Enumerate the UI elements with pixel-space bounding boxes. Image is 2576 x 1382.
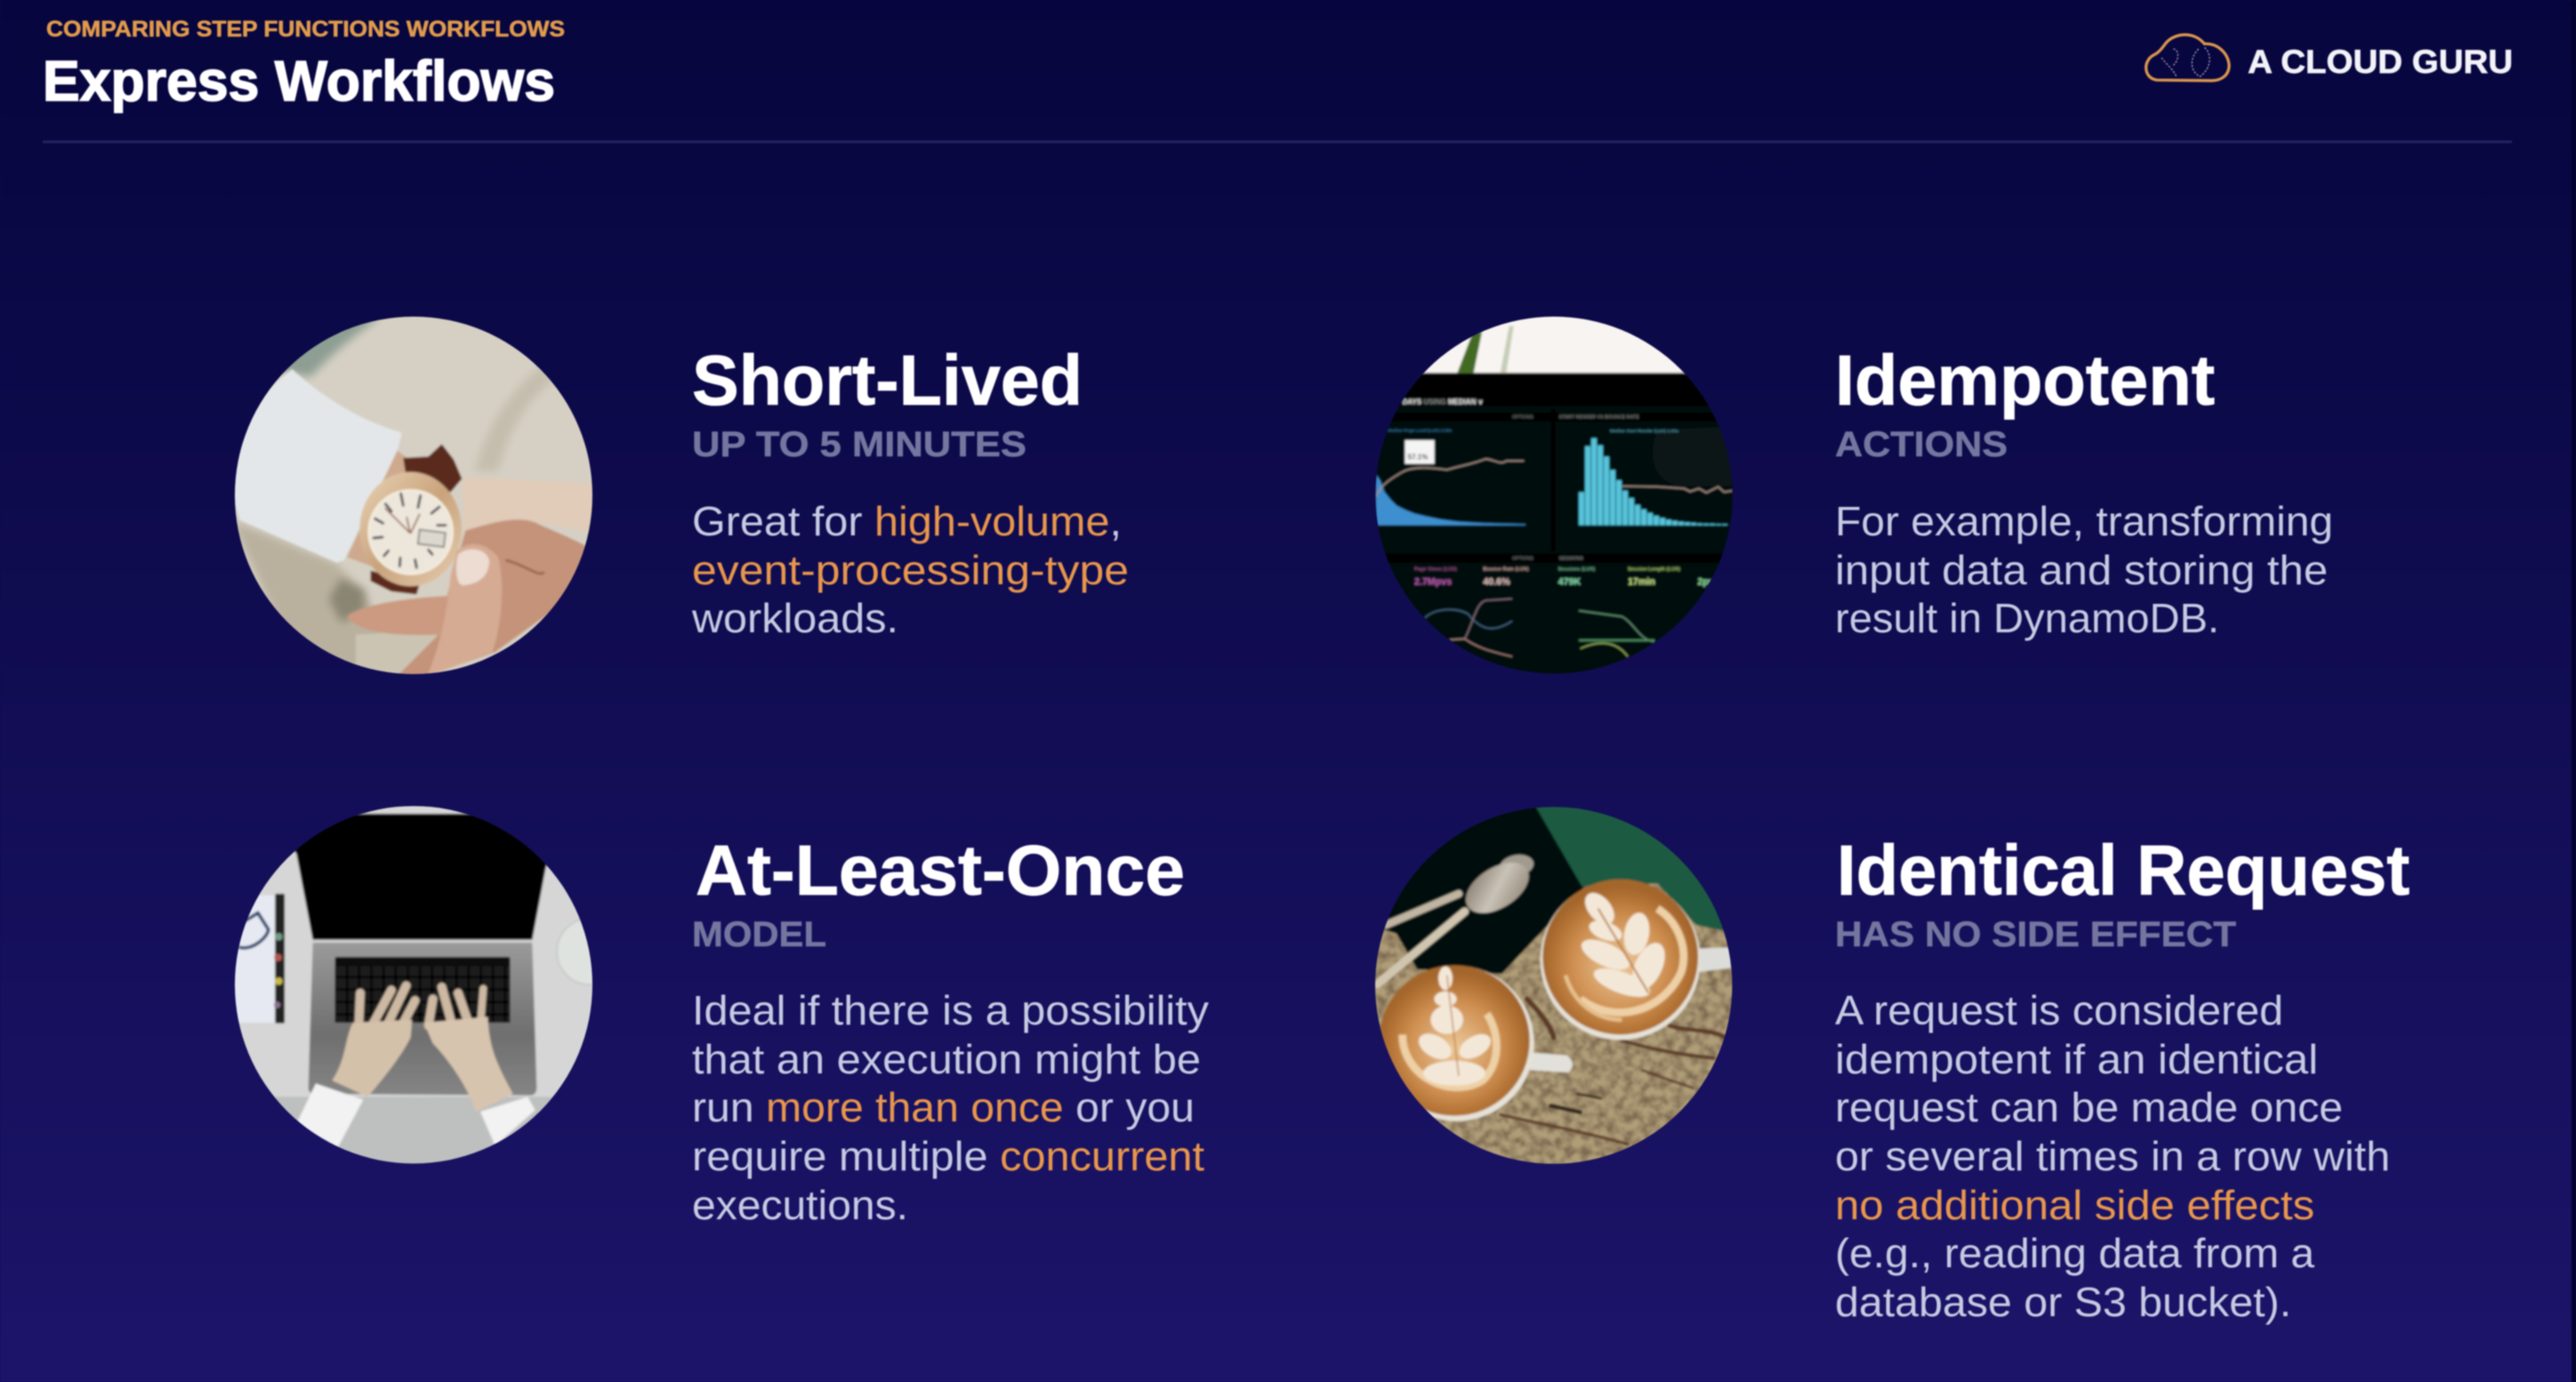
lower line charts (1425, 609, 1512, 629)
panel: Short-Lived (691, 341, 1129, 641)
body text: require multiple concurrent (692, 1133, 1204, 1179)
labels: 2pvs (1697, 576, 1719, 587)
body text: executions. (692, 1182, 908, 1228)
body text: Ideal if there is a possibility (692, 987, 1209, 1033)
labels: Session Length (LUX) (1628, 567, 1680, 573)
logo wordmark: A CLOUD GURU (2248, 44, 2513, 80)
body text: or several times in a row with (1835, 1133, 2390, 1179)
body text: input data and storing the (1835, 547, 2328, 593)
panel: Idempotent (1835, 341, 2333, 641)
panel: At-Least-Once (692, 831, 1209, 1228)
body text: no additional side effects (1835, 1182, 2314, 1228)
cloth (1361, 791, 1585, 974)
photo: analytics dashboard (1375, 315, 1733, 674)
heading: Idempotent (1835, 341, 2215, 420)
body text: request can be made once (1835, 1084, 2343, 1130)
labels: Page Views (LUX) (1414, 567, 1457, 573)
wrist (347, 450, 407, 566)
photo: analytics dashboard: 57.1% (1408, 454, 1428, 462)
bounce line left (1376, 459, 1524, 496)
hands (358, 985, 483, 1029)
body text (692, 987, 1209, 1228)
subheading: HAS NO SIDE EFFECT (1835, 915, 2236, 954)
body text: workloads. (691, 595, 898, 641)
labels: Sessions (LUX) (1558, 567, 1595, 573)
heading: Short-Lived (692, 341, 1083, 420)
hands and ticks (374, 494, 446, 567)
body text: database or S3 bucket). (1835, 1279, 2291, 1325)
tooltip (1405, 440, 1435, 464)
photo: hands typing on laptop (234, 805, 593, 1165)
labels: START RENDER VS BOUNCE RATE (1559, 415, 1639, 421)
labels: OPTIONS (1512, 556, 1534, 561)
cup right (1541, 880, 1732, 1040)
blue histogram (1376, 474, 1525, 526)
labels: DAYS USING MEDIAN ∨ (1403, 398, 1484, 406)
body text: For example, transforming (1835, 498, 2333, 544)
photo: latte art coffee cups (1361, 791, 1752, 1183)
panel: Identical Request (1835, 831, 2410, 1325)
eyebrow: COMPARING STEP FUNCTIONS WORKFLOWS (46, 17, 565, 42)
photo: wristwatch (234, 316, 593, 675)
body text: event-processing-type (692, 547, 1129, 593)
heading: At-Least-Once (696, 831, 1185, 910)
sleeves (296, 1083, 363, 1147)
cyan histogram (1579, 438, 1727, 526)
labels: 17min (1628, 576, 1655, 587)
cup left (1379, 965, 1573, 1121)
labels: SESSIONS (1559, 556, 1583, 561)
labels: Median Page Load (LUX) 3.08s (1388, 429, 1453, 434)
subheading: MODEL (692, 915, 826, 954)
labels: 2.7Mpvs (1414, 576, 1452, 587)
body text: idempotent if an identical (1835, 1036, 2318, 1082)
notebook (231, 896, 276, 1023)
body text: (e.g., reading data from a (1835, 1230, 2314, 1276)
heading: Identical Request (1837, 831, 2410, 910)
labels: Median Start Render (LUX) 1.00s (1610, 429, 1678, 434)
spoons (1386, 894, 1459, 925)
granite marks (1501, 999, 1726, 1145)
body text: that an execution might be (692, 1036, 1201, 1082)
laptop base (309, 943, 536, 1096)
sleeve (229, 369, 402, 563)
labels: Bounce Rate (LUX) (1483, 567, 1529, 573)
labels: 479K (1558, 576, 1581, 587)
header (43, 17, 2513, 113)
straps (403, 444, 462, 492)
body text: Great for high-volume , (692, 498, 1122, 544)
body text (1835, 498, 2333, 641)
icon: cloud (2146, 35, 2229, 81)
logo: A Cloud Guru (2146, 35, 2513, 81)
body text: result in DynamoDB. (1835, 595, 2219, 641)
thumb (427, 544, 502, 676)
subheading: ACTIONS (1835, 425, 2008, 464)
labels: 40.6% (1483, 576, 1510, 587)
body text: run more than once or you (692, 1084, 1195, 1130)
labels (1388, 398, 1719, 587)
case (359, 472, 462, 586)
body text (1835, 987, 2390, 1325)
subheading: UP TO 5 MINUTES (692, 425, 1026, 464)
screen (294, 812, 548, 941)
body text: A request is considered (1835, 987, 2283, 1033)
labels: OPTIONS (1512, 415, 1534, 421)
title: Express Workflows (43, 49, 555, 113)
body text (691, 498, 1129, 641)
bowl (557, 919, 624, 984)
glasses (238, 913, 269, 948)
